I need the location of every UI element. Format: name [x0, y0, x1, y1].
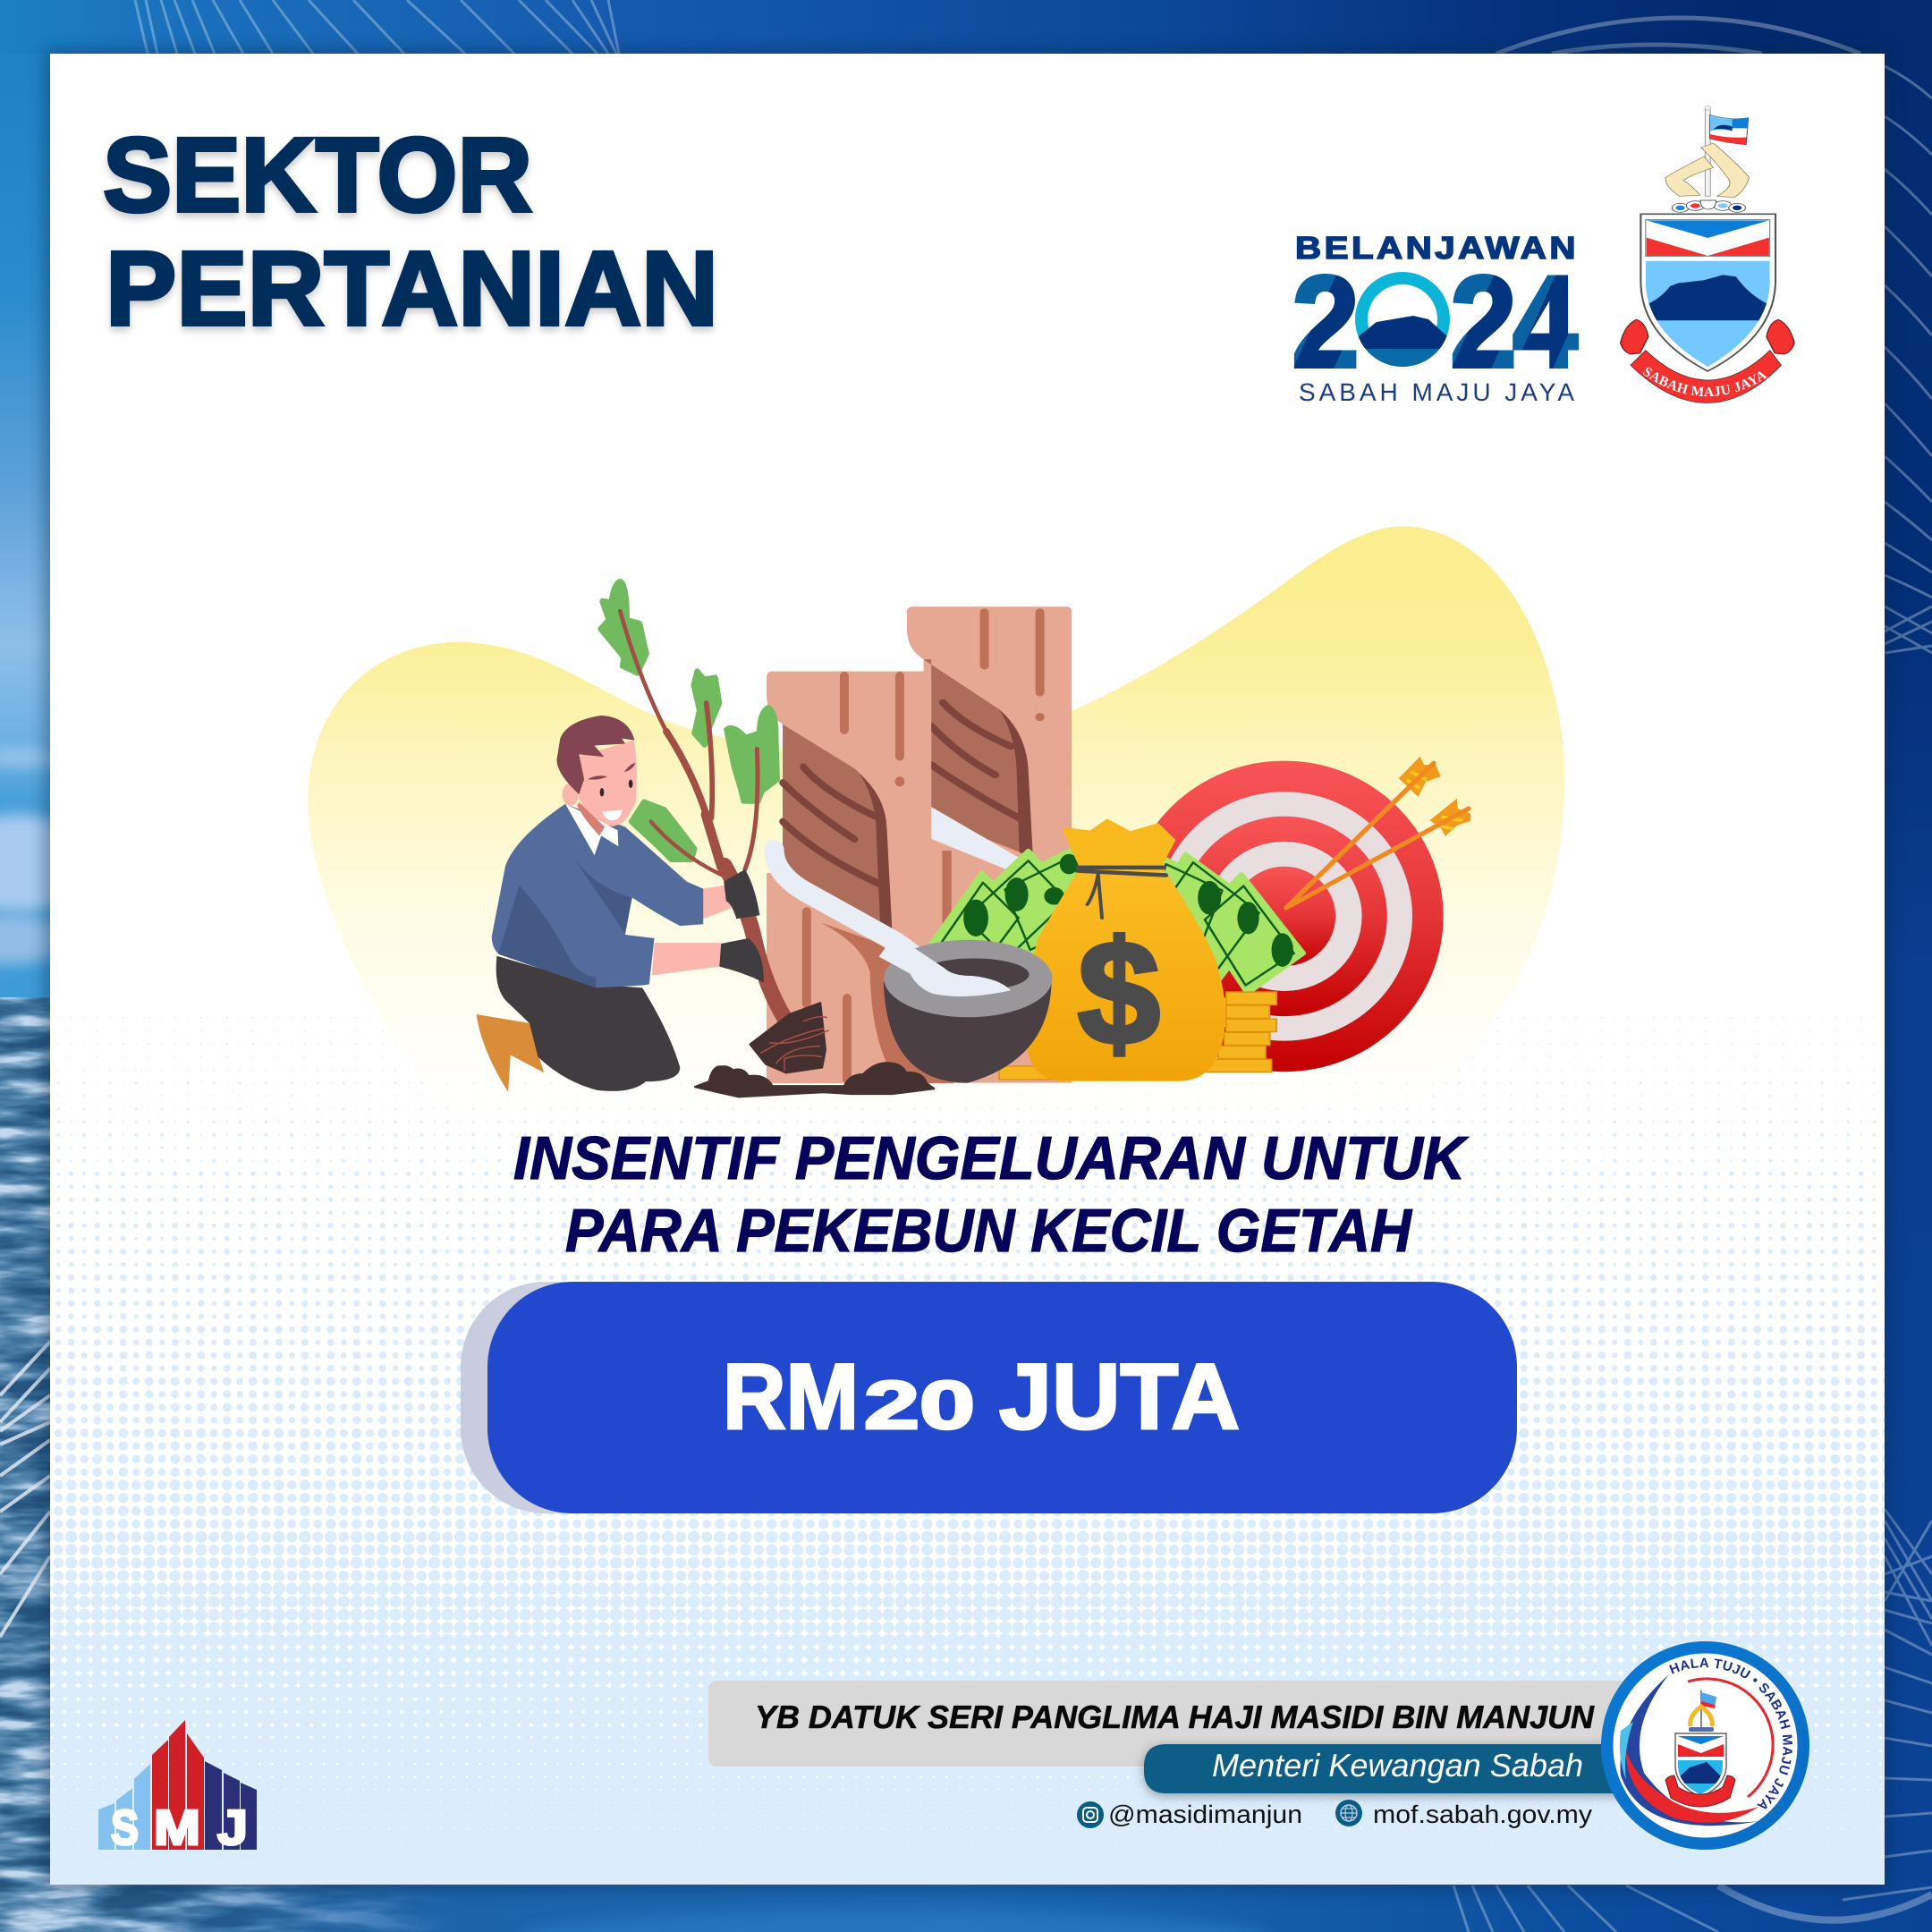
icon: globe: [1335, 1800, 1362, 1826]
farmer kneeling: [477, 716, 829, 1092]
icon: flag: [1705, 106, 1749, 196]
contacts: [1077, 1800, 1592, 1828]
sapling leaves and branches: [600, 581, 784, 1018]
amount text: JUTA: [999, 1345, 1240, 1449]
arrows: [1286, 757, 1470, 908]
icon: shield: [1640, 214, 1775, 371]
icon: beads: [1672, 200, 1745, 212]
panel: amount button: [461, 1282, 1517, 1513]
front rubber tree trunk: [767, 671, 961, 1083]
heading: incentive description: [513, 1124, 1470, 1265]
back rubber tree trunk: [907, 606, 1072, 1083]
panel: minister name: [708, 1681, 1639, 1767]
heading: incentive description: PARA PEKEBUN KECIL GETAH: [565, 1197, 1413, 1265]
logo: Hala Tuju badge: HALA TUJU • SABAH MAJU JAYA: [1669, 1658, 1792, 1809]
logo: Belanjawan 2024: 2: [1450, 249, 1517, 394]
logo: Belanjawan 2024: SABAH MAJU JAYA: [1299, 378, 1574, 406]
icon: small crest: [1665, 1690, 1735, 1807]
illustration: farmer, rubber trees, money bag and target: [308, 526, 1565, 1146]
mortar and pestle: [879, 935, 1053, 1083]
head: [556, 716, 637, 855]
logo: SMJ: J: [217, 1800, 248, 1855]
logo: Belanjawan 2024: BELANJAWAN: [1295, 231, 1579, 266]
soil on ground: [695, 1063, 934, 1097]
root ball: [750, 1003, 829, 1072]
ribbon motto: SABAH MAJU JAYA: [1642, 367, 1767, 397]
title: [103, 116, 718, 348]
panel: minister name: YB DATUK SERI PANGLIMA HAJI MASIDI BIN MANJUN: [755, 1699, 1595, 1735]
amount text: 20: [864, 1368, 975, 1444]
title: SEKTOR: [103, 116, 532, 234]
logo: SMJ: S: [111, 1800, 139, 1855]
panel: minister title: Menteri Kewangan Sabah: [1212, 1747, 1583, 1784]
money bag: [1026, 818, 1225, 1081]
panel: minister title: [1144, 1744, 1637, 1793]
boot: [477, 1014, 544, 1092]
yellow blob backdrop: [308, 526, 1565, 1146]
gloves: [719, 869, 764, 982]
coins: [999, 992, 1276, 1080]
amount text: RM: [723, 1345, 859, 1449]
logo: Hala Tuju badge: [1601, 1641, 1809, 1850]
contacts: @masidimanjun: [1108, 1801, 1302, 1828]
trousers: [496, 956, 680, 1091]
logo: Sabah coat of arms: [1620, 106, 1795, 403]
hands: [652, 886, 732, 976]
banknotes and coins: [931, 849, 1304, 1080]
logo: Belanjawan 2024: 4: [1513, 249, 1578, 394]
logo: Belanjawan 2024: 2: [1292, 249, 1360, 394]
logo: SMJ: [98, 1720, 257, 1855]
logo: Belanjawan 2024: [1292, 231, 1579, 406]
heading: incentive description: INSENTIF PENGELUARAN UNTUK: [513, 1124, 1470, 1192]
amount text: [723, 1345, 1240, 1449]
money bag: $: [1078, 911, 1160, 1075]
contacts: mof.sabah.gov.my: [1373, 1801, 1592, 1828]
target with arrows: [1125, 757, 1470, 1072]
icon: instagram: [1077, 1801, 1104, 1828]
icon: arms: [1665, 143, 1750, 198]
title: PERTANIAN: [106, 230, 718, 348]
icon: ribbon: [1621, 319, 1794, 402]
logo: SMJ: M: [154, 1800, 200, 1855]
sweater: [492, 804, 703, 987]
